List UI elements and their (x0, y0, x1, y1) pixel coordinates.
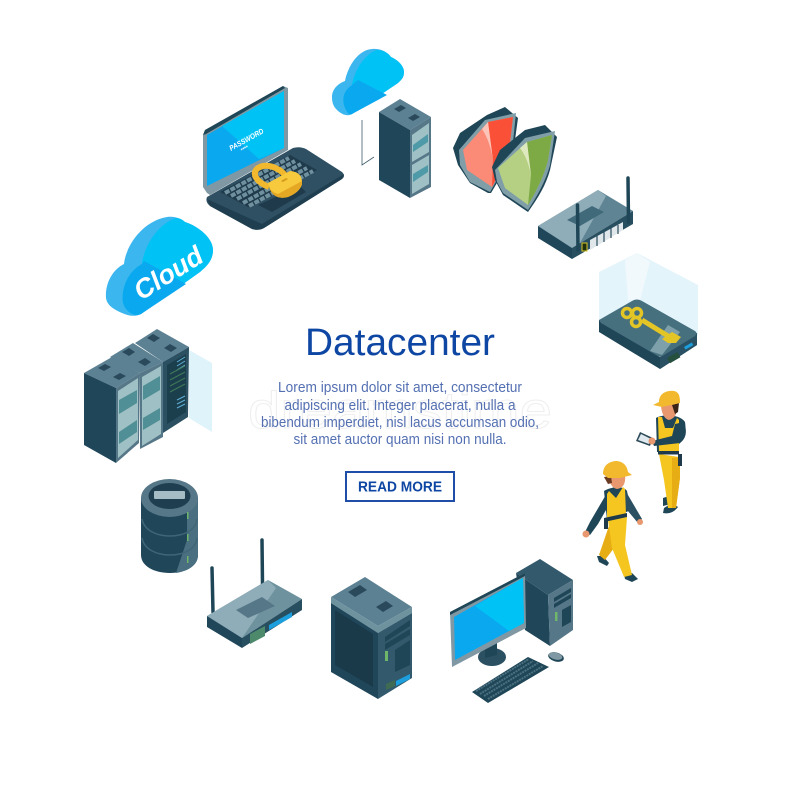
icon: laptop with padlock (203, 86, 344, 230)
icon: server racks (84, 329, 212, 463)
text block: body copy: bibendum imperdiet, nisl lacus accumsan odio, (261, 415, 539, 431)
icon: monitor (450, 573, 526, 667)
text block: body copy (261, 380, 539, 448)
icon: server rack top (379, 99, 431, 198)
icon: worker with tablet (636, 391, 686, 513)
text block: body copy: sit amet auctor quam nisi non nulla. (294, 432, 506, 448)
icon: Cloud badge (106, 217, 213, 316)
icon: laptop with padlock: PASSWORD (228, 126, 266, 153)
icon: server tower (331, 577, 412, 699)
icon: router top right (538, 178, 633, 259)
icon: mouse (547, 651, 565, 663)
icon: key on glass-covered device (599, 253, 698, 369)
icon: red shield (453, 107, 518, 193)
heading: Datacenter (305, 322, 495, 364)
icon: desktop tower (516, 559, 573, 646)
icon: database cylinder (141, 479, 198, 573)
watermark: dreamstime (248, 382, 552, 440)
icon: small cloud (332, 49, 404, 115)
icon: laptop with padlock: **** (240, 145, 250, 154)
button: read more (346, 472, 454, 501)
icon: glass panel under cloud (362, 120, 374, 165)
icon: walking worker (582, 461, 643, 582)
icon: green shield (492, 125, 557, 212)
icon: Cloud badge: Cloud (128, 240, 209, 306)
icon: keyboard (472, 657, 549, 703)
button: read more: READ MORE (358, 480, 442, 496)
text block: body copy: Lorem ipsum dolor sit amet, consectetur (278, 380, 522, 396)
icon: router bottom left (207, 540, 302, 648)
text block: body copy: adipiscing elit. Integer placerat, nulla a (284, 398, 516, 414)
